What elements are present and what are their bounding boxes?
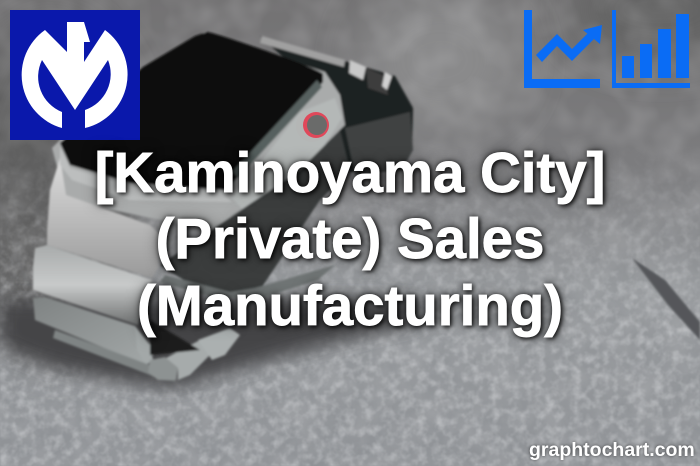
title: [88, 141, 610, 344]
title: (Private) Sales: [156, 207, 544, 270]
footer: site name: graphtochart.com: [529, 439, 695, 461]
title: [Kaminoyama City]: [95, 141, 605, 204]
title: (Manufacturing): [137, 274, 563, 337]
